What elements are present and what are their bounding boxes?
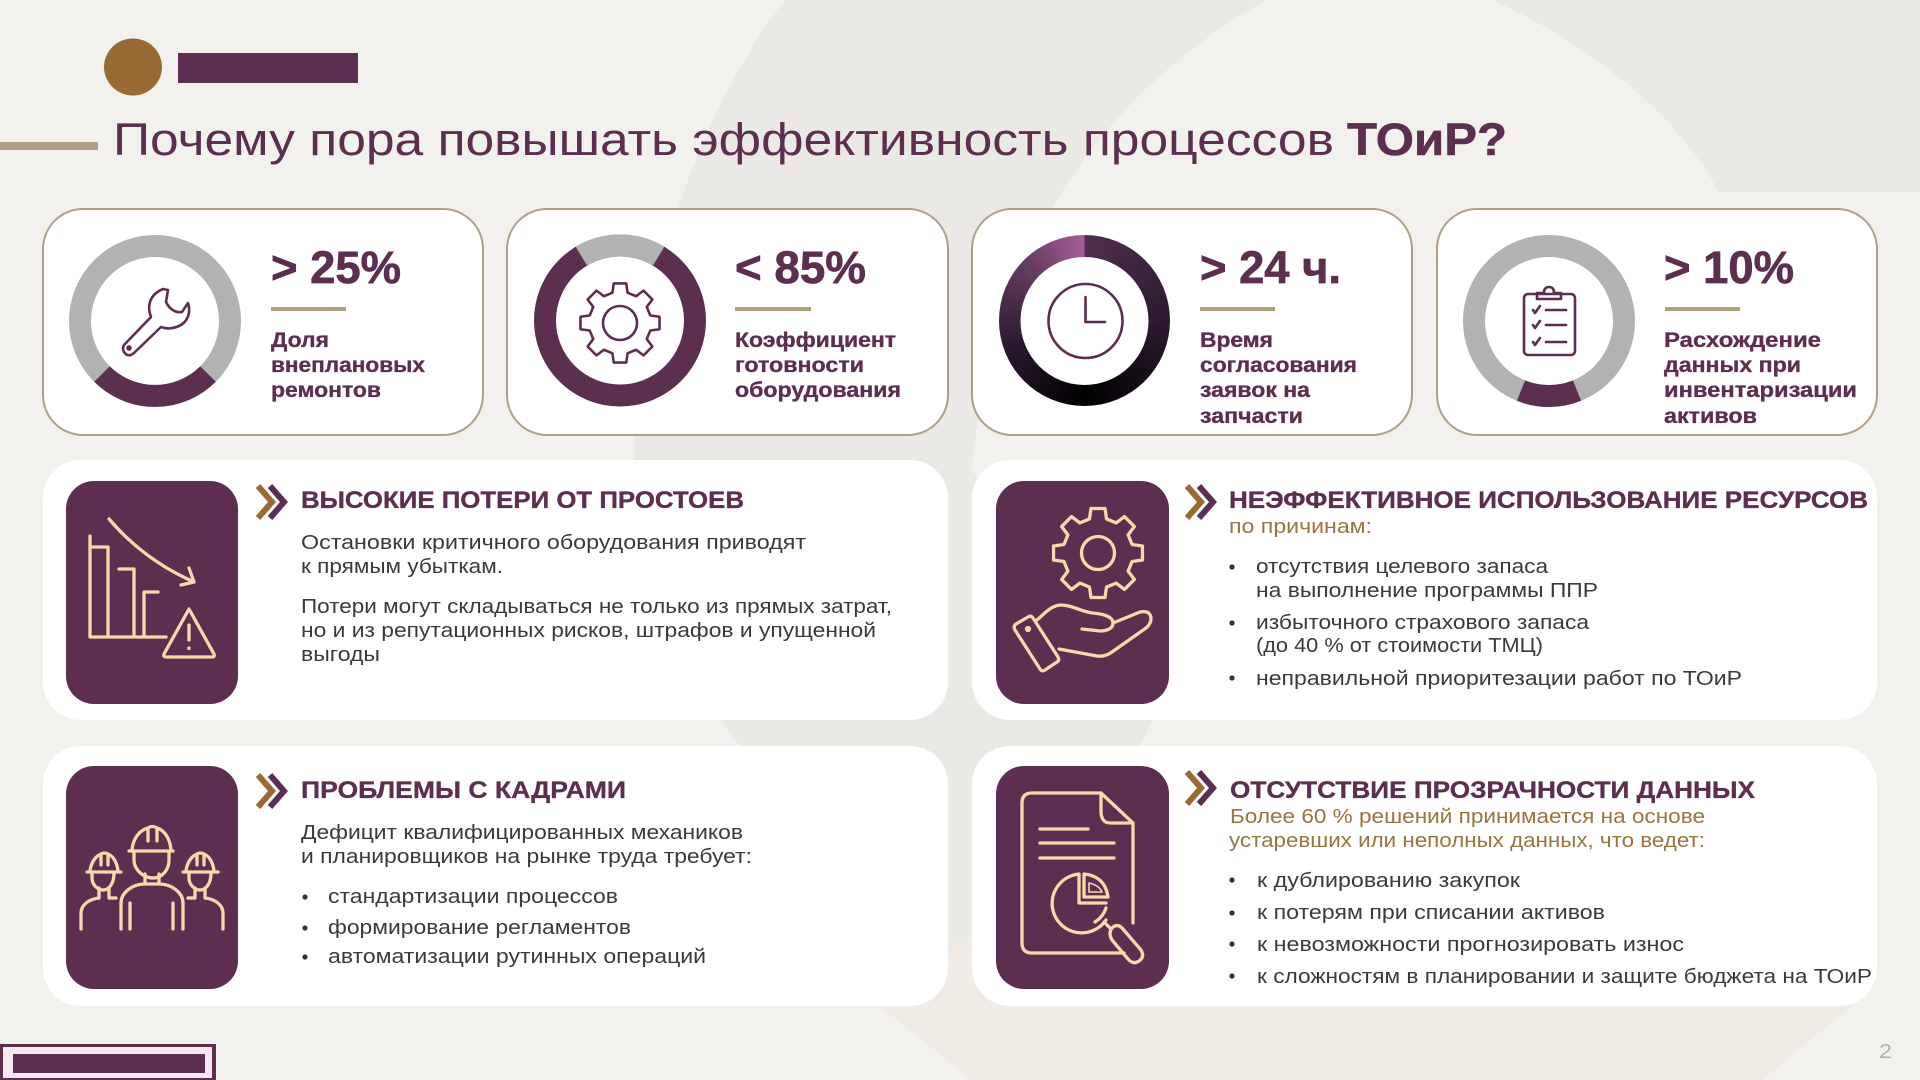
icon: gear [580, 283, 660, 363]
label: данных при [1664, 354, 1801, 377]
label: Время [1200, 329, 1273, 352]
label [735, 329, 901, 402]
bullet list: (до 40 % от стоимости ТМЦ) [1256, 635, 1543, 657]
body text: Остановки критичного оборудования приводят [301, 532, 806, 554]
logo circle [104, 38, 162, 96]
body text [301, 532, 892, 666]
donut: 10 percent [1474, 246, 1624, 396]
panel: resource inefficiency [972, 460, 1877, 720]
subheading [1229, 806, 1705, 852]
body text: к прямым убыткам. [301, 556, 503, 578]
label [1200, 329, 1357, 428]
label: готовности [735, 354, 864, 377]
label: заявок на [1200, 379, 1310, 402]
label: оборудования [735, 379, 901, 402]
icon tile: workers in helmets [66, 766, 238, 989]
panel: data transparency [972, 746, 1877, 1006]
page number: 2 [1879, 1041, 1892, 1063]
label: согласования [1200, 354, 1357, 377]
donut: 85 percent [545, 246, 695, 396]
bullet list: неправильной приоритезации работ по ТОиР [1256, 668, 1742, 690]
chevrons [1187, 772, 1213, 804]
donut: gradient ring [999, 235, 1170, 406]
bullet list: автоматизации рутинных операций [328, 946, 706, 968]
subheading: Более 60 % решений принимается на основе [1230, 806, 1705, 828]
label: инвентаризации [1664, 379, 1857, 402]
label: запчасти [1200, 405, 1303, 428]
bullet list: к невозможности прогнозировать износ [1257, 934, 1684, 956]
value: < 85% [735, 242, 866, 293]
body text: но и из репутационных рисков, штрафов и упущенной [301, 620, 876, 642]
icon tile: document with magnifier [996, 766, 1169, 989]
logo bar [178, 53, 358, 83]
chevrons [1187, 486, 1213, 518]
subheading: по причинам: [1229, 516, 1372, 538]
bullet list: формирование регламентов [328, 917, 631, 939]
label: активов [1664, 405, 1757, 428]
title: ТОиР? [1347, 114, 1507, 165]
label: Расхождение [1664, 329, 1821, 352]
bullet list: избыточного страхового запаса [1256, 612, 1590, 634]
chevrons [258, 486, 284, 518]
label: внеплановых [271, 354, 425, 377]
bullet list [1229, 556, 1742, 690]
icon: clock [1048, 284, 1122, 358]
bullet list: к дублированию закупок [1257, 870, 1520, 892]
body text: и планировщиков на рынке труда требует: [301, 846, 752, 868]
label [1664, 329, 1857, 428]
icon tile: falling chart with warning [66, 481, 238, 704]
body text [301, 822, 752, 868]
subheading: устаревших или неполных данных, что ведет: [1229, 830, 1705, 852]
panel: stat approval time [972, 209, 1412, 435]
icon tile: gear over hand [996, 481, 1169, 704]
title: Почему пора повышать эффективность процессов [113, 114, 1334, 165]
label: ремонтов [271, 379, 381, 402]
value: > 24 ч. [1200, 242, 1341, 293]
bullet list: стандартизации процессов [328, 886, 618, 908]
panel: stat availability [507, 209, 948, 435]
heading: ПРОБЛЕМЫ С КАДРАМИ [301, 777, 626, 804]
bullet list: к сложностям в планировании и защите бюджета на ТОиР [1257, 966, 1872, 988]
value: > 10% [1664, 242, 1794, 293]
body text: выгоды [301, 644, 380, 666]
panel: downtime losses [43, 460, 948, 720]
body text: Дефицит квалифицированных механиков [301, 822, 743, 844]
panel: stat unplanned repairs [43, 209, 483, 435]
bullet list: на выполнение программы ППР [1256, 580, 1598, 602]
bullet list [302, 886, 706, 968]
heading: ВЫСОКИЕ ПОТЕРИ ОТ ПРОСТОЕВ [301, 487, 744, 514]
value: > 25% [271, 242, 401, 293]
bullet list: отсутствия целевого запаса [1256, 556, 1549, 578]
title accent line [0, 142, 98, 150]
label [271, 329, 425, 402]
body text: Потери могут складываться не только из прямых затрат, [301, 596, 892, 618]
panel: staffing problems [43, 746, 948, 1006]
panel: stat inventory gap [1437, 209, 1877, 435]
label: Доля [271, 329, 329, 352]
bullet list: к потерям при списании активов [1257, 902, 1605, 924]
heading: НЕЭФФЕКТИВНОЕ ИСПОЛЬЗОВАНИЕ РЕСУРСОВ [1229, 487, 1868, 514]
bullet list [1229, 870, 1872, 988]
heading: ОТСУТСТВИЕ ПРОЗРАЧНОСТИ ДАННЫХ [1230, 777, 1755, 804]
icon: clipboard [1524, 287, 1575, 355]
chevrons [258, 775, 284, 807]
footer label box [0, 1044, 216, 1080]
donut: 25 percent [80, 246, 230, 396]
label: Коэффициент [735, 329, 896, 352]
icon: wrench [123, 289, 189, 355]
